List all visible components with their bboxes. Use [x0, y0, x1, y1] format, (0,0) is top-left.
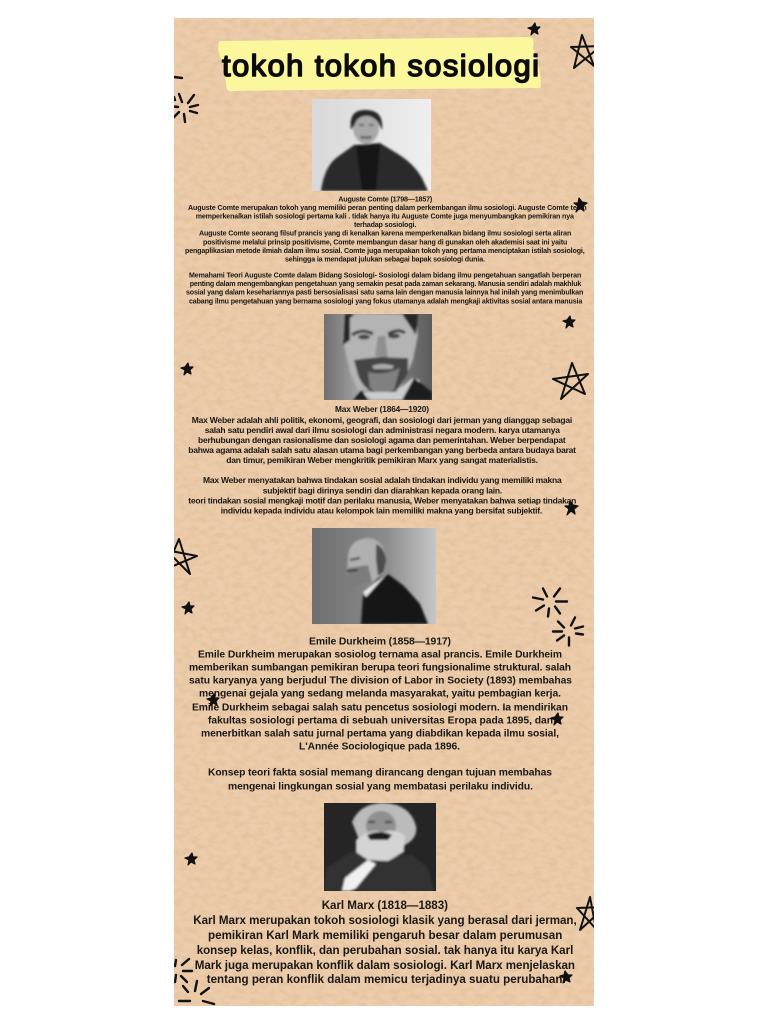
- caption and biography: Emile Durkheim: [189, 636, 572, 792]
- caption and biography: Emile Durkheim: Emile Durkheim sebagai salah satu pencetus sosiologi modern. Ia mendirikan: [192, 702, 568, 714]
- caption and biography: Auguste Comte: pengaplikasian metode ilmiah dalam ilmu sosial. Comte juga merupakan tokoh yang pertama menciptakan istilah sosiologi,: [185, 247, 585, 255]
- caption and biography: Emile Durkheim: menerbitkan salah satu jurnal pertama yang diabdikan kepada ilmu sosial,: [201, 728, 559, 740]
- caption and biography: Auguste Comte: penting dalam mengembangkan pengetahuan yang semakin pesat pada zaman sekarang. Manusia sendiri adalah makhluk: [190, 280, 581, 288]
- caption and biography: Emile Durkheim: Emile Durkheim merupakan sosiolog ternama asal prancis. Emile Durkheim: [198, 650, 562, 660]
- caption and biography: Auguste Comte: Auguste Comte seorang filsuf prancis yang di kenalkan karena memperkenalkan bidang ilmu sosiologi serta aliran: [199, 230, 571, 238]
- caption and biography: Emile Durkheim: mengenai gejala yang sedang melanda masyarakat, yaitu pembagian kerja.: [199, 688, 561, 700]
- caption and biography: Karl Marx: konsep kelas, konflik, dan perubahan sosial. tak hanya itu karya Karl: [197, 944, 573, 957]
- caption and biography: Max Weber: teori tindakan sosial mengkaji motif dan perilaku manusia, Weber menyatakan bahwa setiap tindakan: [188, 496, 576, 506]
- icons: small filled stars: [181, 23, 587, 983]
- caption and biography: Emile Durkheim: Emile Durkheim (1858—1917): [309, 636, 451, 648]
- caption and biography: Auguste Comte: Memahami Teori Auguste Comte dalam Bidang Sosiologi- Sosiologi dalam bidang ilmu pengetahuan sangatlah berperan: [189, 272, 581, 280]
- portrait: Karl Marx: [324, 803, 436, 891]
- caption and biography: Emile Durkheim: L'Année Sociologique pada 1896.: [299, 742, 460, 752]
- icon: outline star bottom right: [576, 896, 594, 931]
- caption and biography: Auguste Comte: memperkenalkan istilah sosiologi pertama kali . tidak hanya itu Auguste Comte juga menyumbangkan pemikiran nya: [196, 213, 574, 221]
- icons: bursts: [170, 77, 583, 1004]
- caption and biography: Max Weber: Max Weber adalah ahli politik, ekonomi, geografi, dan sosiologi dari jerman yang dianggap sebagai: [192, 415, 572, 425]
- caption and biography: Max Weber: Max Weber (1864—1920): [335, 404, 429, 414]
- caption and biography: Karl Marx: Karl Marx merupakan tokoh sosiologi klasik yang berasal dari jerman,: [193, 914, 577, 927]
- caption and biography: Max Weber: dan timur, pemikiran Weber mengkritik pemikiran Marx yang sangat materialistis.: [226, 455, 538, 465]
- portrait: Auguste Comte: [312, 99, 431, 191]
- caption and biography: Emile Durkheim: satu karyanya yang berjudul The division of Labor in Society (1893) membahas: [189, 676, 572, 686]
- caption and biography: Auguste Comte: cabang ilmu pengetahuan yang bernama sosiologi yang fokus utamanya adalah mengkaji aktivitas sosial antara manusia: [189, 298, 582, 306]
- caption and biography: Auguste Comte: sosial yang dalam kesehariannya pasti bersosialisasi satu sama lain dengan manusia lainnya hal inilah yang menimbulkan: [186, 288, 583, 296]
- caption and biography: Auguste Comte: Auguste Comte merupakan tokoh yang memiliki peran penting dalam perkembangan ilmu sosiologi. Auguste Comte telah: [188, 204, 587, 212]
- decorative doodles: stars and bursts: [166, 23, 605, 1004]
- caption and biography: Max Weber: [188, 404, 576, 516]
- caption and biography: Karl Marx: Karl Marx (1818—1883): [322, 899, 448, 912]
- caption and biography: Auguste Comte: sehingga ia mendapat julukan sebagai bapak sosiologi dunia.: [285, 256, 485, 264]
- caption and biography: Max Weber: bahwa agama adalah salah satu alasan utama bagi perkembangan yang berbeda antara budaya barat: [188, 445, 576, 455]
- caption and biography: Karl Marx: [193, 899, 577, 986]
- icon: outline star right middle: [553, 363, 588, 399]
- caption and biography: Auguste Comte: [185, 194, 587, 306]
- portrait: Max Weber: [324, 314, 432, 400]
- caption and biography: Auguste Comte: positivisme melalui prinsip positivisme, Comte membangun dasar hang di gunakan oleh akademisi saat ini yaitu: [203, 238, 567, 246]
- caption and biography: Emile Durkheim: Konsep teori fakta sosial memang dirancang dengan tujuan membahas: [208, 768, 552, 778]
- caption and biography: Auguste Comte: terhadap sosiologi.: [354, 221, 416, 229]
- title: tokoh tokoh sosiologi: [222, 48, 539, 83]
- caption and biography: Karl Marx: Mark juga merupakan konflik dalam sosiologi. Karl Marx menjelaskan: [195, 959, 575, 972]
- caption and biography: Karl Marx: tentang peran konflik dalam memicu terjadinya suatu perubahan.: [207, 973, 566, 986]
- caption and biography: Max Weber: berhubungan dengan rasionalisme dan sosiologi agama dan pemerintahan. Weber berpendapat: [198, 435, 566, 445]
- caption and biography: Emile Durkheim: memberikan sumbangan pemikiran berupa teori fungsionalime struktural. salah: [189, 662, 571, 674]
- caption and biography: Max Weber: Max Weber menyatakan bahwa tindakan sosial adalah tindakan individu yang memiliki makna: [203, 475, 562, 485]
- icon: outline star top right: [570, 34, 594, 69]
- caption and biography: Auguste Comte: Auguste Comte (1798—1857): [338, 194, 433, 204]
- caption and biography: Max Weber: salah satu pendiri awal dari ilmu sosiologi dan administrasi negara modern. karya utamanya: [205, 425, 560, 435]
- title highlight: [218, 37, 541, 91]
- caption and biography: Emile Durkheim: mengenai lingkungan sosial yang membatasi perilaku individu.: [228, 782, 533, 792]
- caption and biography: Karl Marx: pemikiran Karl Mark memiliki pengaruh besar dalam perumusan: [208, 929, 562, 942]
- icon: outline star left: [174, 538, 198, 575]
- caption and biography: Max Weber: subjektif bagi dirinya sendiri dan diarahkan kepada orang lain.: [263, 486, 502, 496]
- caption and biography: Max Weber: individu kepada individu atau kelompok lain memiliki makna yang bersifat subjektif.: [221, 506, 542, 516]
- caption and biography: Emile Durkheim: fakultas sosiologi pertama di sebuah universitas Eropa pada 1895, dan: [208, 716, 553, 726]
- panel: kraft paper background: [174, 18, 594, 1006]
- portrait: Emile Durkheim: [312, 528, 436, 624]
